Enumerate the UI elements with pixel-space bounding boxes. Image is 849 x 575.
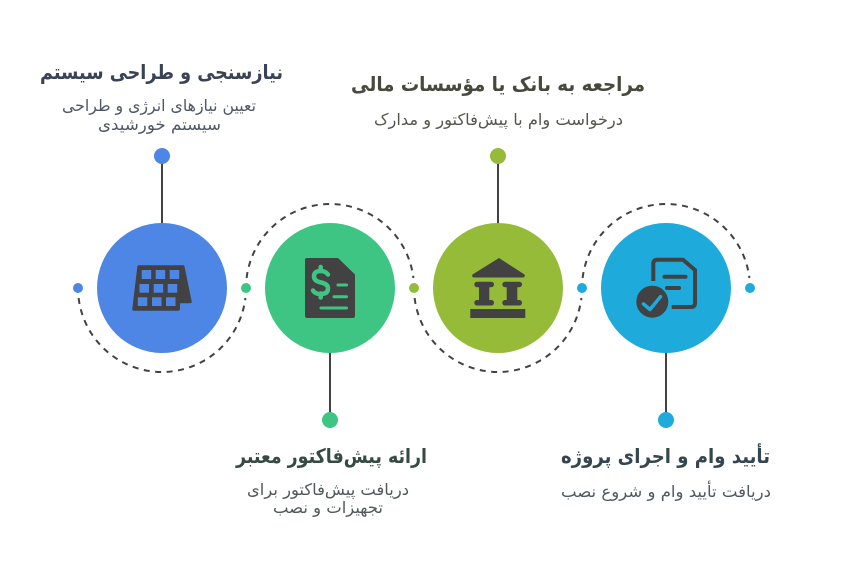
text: step 1: سیستم خورشیدی [98, 115, 221, 135]
step 2: invoice circle [265, 223, 395, 428]
path dots [73, 283, 755, 293]
text: step 3: درخواست وام با پیش‌فاکتور و مدارک [374, 110, 623, 130]
icon: bank [470, 258, 525, 318]
text: step 1 [40, 60, 283, 135]
text: step 4 [561, 442, 771, 502]
text: step 4: تأیید وام و اجرای پروژه [561, 442, 770, 469]
step 4: approval circle [601, 223, 731, 428]
text: step 2: تجهیزات و نصب [273, 498, 383, 518]
text: step 4: دریافت تأیید وام و شروع نصب [561, 480, 771, 502]
icon: approved document [636, 260, 695, 318]
step 3: bank circle [433, 148, 563, 353]
text: step 2: دریافت پیش‌فاکتور برای [247, 480, 409, 500]
icon: invoice [305, 258, 355, 318]
text: step 1: تعیین نیازهای انرژی و طراحی [62, 96, 256, 116]
text: step 1: نیازسنجی و طراحی سیستم [40, 60, 283, 84]
text: step 3 [351, 72, 645, 130]
dashed connector path [79, 204, 749, 372]
connector lines [162, 164, 666, 412]
text: step 2: ارائه پیش‌فاکتور معتبر [235, 444, 427, 469]
text: step 3: مراجعه به بانک یا مؤسسات مالی [351, 72, 645, 96]
text: step 2 [235, 444, 427, 518]
icon: solar panel [132, 265, 192, 311]
step 1: solar panel circle [97, 148, 227, 353]
